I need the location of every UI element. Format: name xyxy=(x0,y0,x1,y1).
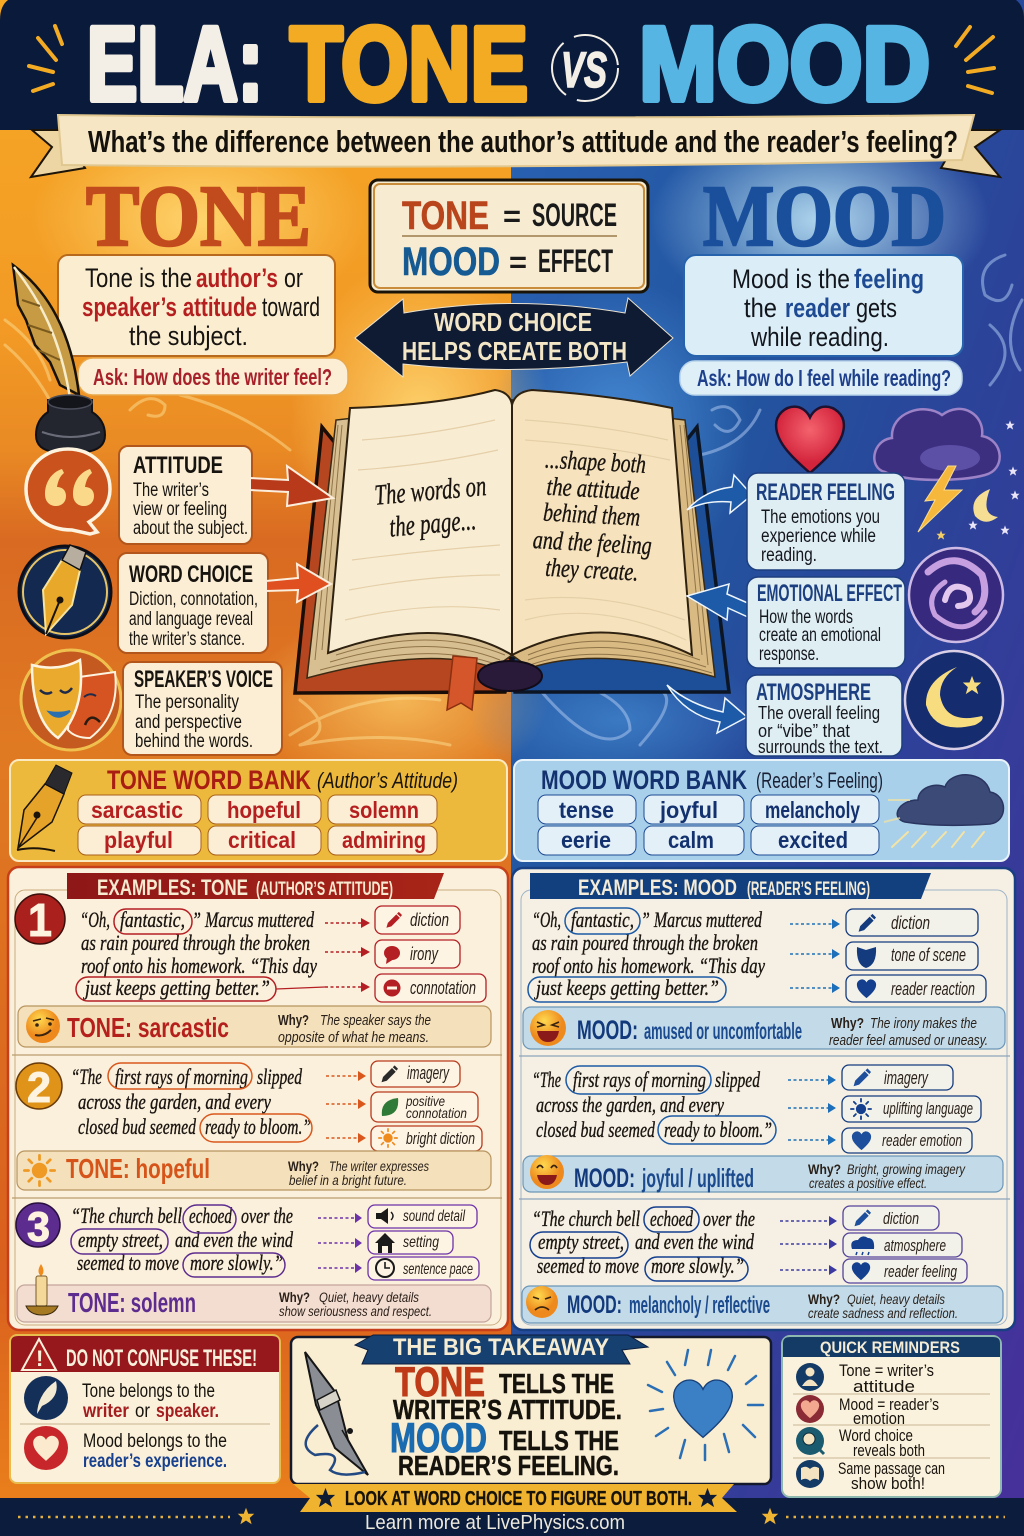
panel: tone word bank: solemn xyxy=(349,797,419,823)
result: tone hopeful xyxy=(17,1151,491,1190)
reminder: mood xyxy=(796,1395,939,1428)
mood example 1 quote: “Oh, xyxy=(532,907,561,932)
result: tone sarcastic: opposite of what he means. xyxy=(278,1029,429,1046)
chip: tone of scene: tone of scene xyxy=(891,945,966,965)
example 2 quote: slipped xyxy=(257,1064,303,1089)
result: mood melancholy: create sadness and reflection. xyxy=(808,1305,958,1321)
panel: reader feeling: reading. xyxy=(761,545,817,566)
mood example 2 quote: slipped xyxy=(715,1067,761,1092)
mood definition box: reader xyxy=(785,293,850,323)
result: mood melancholy: Quiet, heavy details xyxy=(847,1291,945,1307)
tone definition box: or xyxy=(284,263,303,293)
mood example 1 quote xyxy=(528,907,765,1002)
header band xyxy=(0,0,1024,130)
center equation box: = xyxy=(509,246,527,279)
mood definition box: the xyxy=(744,293,777,323)
panel: do not confuse: or xyxy=(135,1401,151,1422)
arrow: emotional effect to book xyxy=(687,584,750,620)
reminder: same passage xyxy=(796,1459,945,1493)
panel: big takeaway: WRITER’S ATTITUDE. xyxy=(393,1394,622,1425)
result: tone sarcastic: The speaker says the xyxy=(320,1012,431,1029)
mood example 3 quote xyxy=(530,1206,755,1281)
reminder: word choice: Word choice xyxy=(839,1426,913,1445)
bookmark ribbon xyxy=(447,656,477,710)
tone definition box: author’s xyxy=(196,263,278,293)
chip: irony xyxy=(375,940,460,968)
book text left xyxy=(373,470,490,545)
title: ELA: xyxy=(87,6,263,123)
example 2 number badge: 2 xyxy=(27,1064,51,1112)
book text left: The words on xyxy=(373,470,488,512)
example 2 quote: closed bud seemed xyxy=(78,1114,197,1139)
example 1 quote xyxy=(76,907,325,1001)
background: mood half xyxy=(511,0,1024,1500)
mood example 2 quote: ready to bloom.” xyxy=(664,1117,772,1142)
panel: tone word bank: hopeful xyxy=(227,797,301,823)
panel: mood word bank: eerie xyxy=(561,827,611,853)
panel: do not confuse xyxy=(10,1335,280,1483)
panel: tone word bank: critical xyxy=(228,827,296,853)
reminder: mood: emotion xyxy=(853,1409,905,1428)
result: tone hopeful: TONE: hopeful xyxy=(66,1153,210,1184)
icon: storm cloud xyxy=(874,409,1000,480)
panel: reader feeling: experience while xyxy=(761,526,876,547)
chip: mood imagery xyxy=(842,1065,953,1090)
chip: setting xyxy=(368,1231,453,1254)
reminder: tone: attitude xyxy=(853,1377,915,1396)
panel: quick reminders xyxy=(782,1336,1001,1497)
icon: candle xyxy=(26,1264,58,1315)
icon: sad face xyxy=(526,1286,558,1318)
chip: mood diction 3 xyxy=(843,1206,939,1230)
background: warm and cool glows xyxy=(5,120,1022,790)
footer band xyxy=(0,1498,1024,1536)
example 3 quote xyxy=(71,1203,294,1277)
arrow: book to atmosphere xyxy=(667,685,747,733)
panel: do not confuse: DO NOT CONFUSE THESE! xyxy=(66,1345,257,1372)
panel: speaker's voice: SPEAKER’S VOICE xyxy=(134,666,273,693)
chip: connotation: connotation xyxy=(410,978,476,998)
panel: emotional effect: response. xyxy=(759,644,819,665)
chip: sentence pace xyxy=(368,1257,479,1280)
tone definition box: the subject. xyxy=(129,321,248,351)
example 2 quote: “The xyxy=(71,1064,102,1089)
panel: mood examples xyxy=(512,868,1015,1330)
panel: mood word bank: excited xyxy=(778,827,848,853)
vs badge: VS xyxy=(561,42,607,98)
example 2 number badge xyxy=(16,1063,62,1112)
result: mood joyful xyxy=(523,1155,1003,1193)
chip: uplifting language: uplifting language xyxy=(883,1099,973,1118)
panel: tone word bank: playful xyxy=(104,827,173,853)
result: tone solemn: Why? xyxy=(279,1289,310,1305)
icon: pen nib xyxy=(17,765,72,851)
panel: big takeaway: READER’S FEELING. xyxy=(398,1450,619,1481)
mood example 2 quote: first rays of morning xyxy=(573,1067,706,1092)
mood definition box: Mood is the xyxy=(732,264,850,294)
center equation box: SOURCE xyxy=(532,197,617,233)
chip: bright diction: bright diction xyxy=(406,1129,475,1148)
icon: large pen nib xyxy=(305,1352,368,1475)
example 1 number badge: 1 xyxy=(28,894,52,946)
result: mood joyful: MOOD: xyxy=(574,1163,635,1193)
panel: emotional effect xyxy=(747,577,905,668)
icon: theatre masks badge xyxy=(21,650,121,750)
panel: speaker's voice: The personality xyxy=(135,692,239,713)
reminder: tone: Tone = writer’s xyxy=(839,1361,934,1380)
mood example 3 quote: empty street, xyxy=(538,1229,624,1254)
chip: mood diction 3: diction xyxy=(883,1209,919,1228)
result: mood melancholy: Why? xyxy=(808,1291,840,1307)
reminder: same passage: show both! xyxy=(851,1474,925,1493)
example 2 quote: ready to bloom.” xyxy=(205,1114,311,1139)
result: mood joyful: joyful / uplifted xyxy=(641,1163,754,1193)
tone examples heading ribbon: EXAMPLES: TONE xyxy=(97,875,248,900)
chip: irony: irony xyxy=(410,944,439,964)
double arrow: word choice: WORD CHOICE xyxy=(434,307,592,337)
mood example 3 quote: “The church bell xyxy=(532,1206,640,1231)
tone definition box: speaker’s attitude xyxy=(82,292,257,322)
example 3 number badge xyxy=(16,1203,60,1250)
panel: atmosphere: ATMOSPHERE xyxy=(756,679,871,706)
icon: night sky crescent and stars xyxy=(936,420,1020,540)
panel: mood word bank: joyful xyxy=(659,797,718,823)
chip: atmosphere xyxy=(843,1233,962,1257)
subtitle banner xyxy=(31,115,1000,177)
book xyxy=(295,390,729,710)
chip: mood diction: diction xyxy=(891,913,930,933)
mood examples heading ribbon: (READER’S FEELING) xyxy=(747,879,870,900)
chip: positive connotation xyxy=(371,1092,478,1122)
result: mood melancholy: melancholy / reflective xyxy=(629,1292,770,1319)
tone examples heading ribbon xyxy=(67,873,444,900)
panel: word choice: WORD CHOICE xyxy=(129,561,253,588)
result: tone solemn: show seriousness and respect. xyxy=(279,1303,432,1319)
result: mood amused: Why? xyxy=(831,1015,864,1032)
panel: word choice xyxy=(118,553,268,653)
chip: reader emotion: reader emotion xyxy=(882,1131,962,1150)
reminder: tone xyxy=(796,1361,934,1396)
panel: do not confuse: speaker. xyxy=(156,1401,219,1422)
title sparks xyxy=(29,26,994,93)
arrow: word choice to book xyxy=(266,564,331,602)
icon: speech bubble with quotes xyxy=(26,449,110,534)
chip: imagery xyxy=(371,1061,460,1087)
mood example 3 quote: over the xyxy=(703,1206,755,1231)
mood heading: MOOD xyxy=(703,167,946,264)
center equation box xyxy=(370,180,648,292)
mood example 1 quote: just keeps getting better.” xyxy=(534,975,719,1000)
mood ask pill xyxy=(680,361,962,395)
book text right: they create. xyxy=(545,553,639,587)
result: mood amused xyxy=(523,1007,1005,1049)
result: mood amused: MOOD: xyxy=(577,1015,638,1045)
reminder: mood: Mood = reader’s xyxy=(839,1395,939,1414)
result: mood melancholy xyxy=(522,1286,1003,1323)
mood examples heading ribbon: EXAMPLES: MOOD xyxy=(578,875,737,900)
example 3 quote: over the xyxy=(241,1203,293,1228)
result: tone sarcastic: TONE: sarcastic xyxy=(67,1012,229,1043)
panel: atmosphere: surrounds the text. xyxy=(758,736,883,757)
panel: attitude: view or feeling xyxy=(133,499,227,520)
double arrow: word choice: HELPS CREATE BOTH xyxy=(402,336,627,366)
panel: mood word bank: tense xyxy=(559,797,614,823)
panel: word choice: and language reveal xyxy=(129,609,253,630)
panel: tone word bank: admiring xyxy=(342,827,426,853)
icon: feather badge xyxy=(24,1376,68,1420)
title xyxy=(87,6,930,123)
mood definition box: gets xyxy=(856,293,897,323)
icon: pen nib badge xyxy=(19,545,111,638)
panel: mood word bank: (Reader’s Feeling) xyxy=(756,768,883,793)
panel: big takeaway xyxy=(291,1334,771,1484)
icon: blue heart with rays xyxy=(648,1350,763,1460)
result: tone sarcastic xyxy=(18,1006,491,1047)
panel: tone word bank xyxy=(10,760,507,861)
book text right: and the feeling xyxy=(532,525,652,560)
mood definition box: feeling xyxy=(854,264,924,294)
yellow callout ribbon: LOOK AT WORD CHOICE TO FIGURE OUT BOTH. xyxy=(345,1488,692,1510)
mood example 3 quote: echoed xyxy=(650,1206,694,1231)
chip: diction: diction xyxy=(410,910,449,930)
chip: sentence pace: sentence pace xyxy=(403,1261,473,1278)
example 3 quote: and even the wind xyxy=(175,1227,294,1252)
mood example 2 quote: across the garden, and every xyxy=(536,1092,724,1117)
tone ask pill xyxy=(78,358,348,395)
chip: imagery: imagery xyxy=(407,1063,450,1083)
result: tone sarcastic: Why? xyxy=(278,1012,309,1029)
example 3 quote: echoed xyxy=(189,1203,233,1228)
result: tone hopeful: belief in a bright future. xyxy=(289,1172,407,1188)
example 1 quote: fantastic, xyxy=(120,907,185,932)
chip: reader feeling: reader feeling xyxy=(884,1262,957,1281)
book text right: the attitude xyxy=(546,472,640,506)
icon: red heart xyxy=(776,407,844,473)
chip: mood diction xyxy=(846,909,978,936)
tone examples heading ribbon: (AUTHOR’S ATTITUDE) xyxy=(256,879,393,900)
panel: tone examples xyxy=(8,867,508,1330)
tone definition box: toward xyxy=(262,292,320,322)
chip: positive connotation: connotation xyxy=(406,1105,467,1121)
example 3 number badge: 3 xyxy=(27,1203,50,1250)
panel: emotional effect: How the words xyxy=(759,607,853,628)
chip: bright diction xyxy=(371,1126,482,1151)
example 2 quote: across the garden, and every xyxy=(78,1089,271,1114)
center equation box: MOOD xyxy=(402,240,500,284)
panel: reader feeling: The emotions you xyxy=(761,507,880,528)
chip: reader reaction xyxy=(846,975,986,1002)
panel: attitude xyxy=(119,446,252,544)
panel: quick reminders: QUICK REMINDERS xyxy=(820,1338,960,1357)
panel: atmosphere: or “vibe” that xyxy=(758,720,850,741)
vs badge xyxy=(552,35,618,101)
panel: tone word bank: sarcastic xyxy=(91,797,183,823)
panel: attitude: about the subject. xyxy=(133,518,248,539)
result: mood joyful: Why? xyxy=(808,1161,841,1177)
panel: speaker's voice: and perspective xyxy=(135,712,242,733)
panel: reader feeling: READER FEELING xyxy=(756,479,895,506)
center equation box: = xyxy=(503,200,521,233)
yellow callout ribbon xyxy=(293,1484,737,1512)
footer link text: Learn more at LivePhysics.com xyxy=(365,1512,625,1534)
chip: diction xyxy=(375,906,460,934)
panel: big takeaway: MOOD xyxy=(390,1414,487,1461)
mood example 3 arrows xyxy=(780,1216,837,1275)
mood definition box: while reading. xyxy=(750,322,889,352)
mood example 1 quote: fantastic, xyxy=(571,907,634,932)
icon: warning triangle xyxy=(22,1339,56,1371)
example 3 arrows xyxy=(318,1213,362,1273)
example 1 quote: ” Marcus muttered xyxy=(192,907,315,932)
footer dots and stars xyxy=(18,1508,1005,1524)
result: mood joyful: creates a positive effect. xyxy=(809,1175,927,1191)
example 3 quote: “The church bell xyxy=(71,1203,182,1228)
result: mood joyful: Bright, growing imagery xyxy=(847,1161,966,1177)
chip: setting: setting xyxy=(403,1234,439,1251)
example 1 quote: “Oh, xyxy=(80,907,110,932)
background: tone half xyxy=(0,0,511,1500)
mood example 2 quote: “The xyxy=(532,1067,561,1092)
reminder: word choice xyxy=(796,1426,925,1460)
tone heading: TONE xyxy=(86,167,311,264)
takeaway ribbon: THE BIG TAKEAWAY xyxy=(393,1334,609,1361)
panel: mood word bank xyxy=(514,760,1009,861)
mood example 3 quote: and even the wind xyxy=(635,1229,755,1254)
panel: mood word bank: melancholy xyxy=(765,797,860,823)
reminder: word choice: reveals both xyxy=(853,1441,925,1460)
example 3 quote: seemed to move xyxy=(77,1250,179,1275)
panel: tone word bank: (Author’s Attitude) xyxy=(317,768,458,793)
example 1 quote: just keeps getting better.” xyxy=(83,975,270,1000)
panel: atmosphere xyxy=(746,675,902,757)
chip: positive connotation: positive xyxy=(405,1093,445,1109)
title: MOOD xyxy=(639,6,930,123)
icon: lightning bolt xyxy=(918,466,962,532)
chip: reader reaction: reader reaction xyxy=(891,979,975,999)
panel: big takeaway: TELLS THE xyxy=(499,1425,619,1456)
example 1 quote: roof onto his homework. “This day xyxy=(81,953,317,978)
panel: do not confuse: writer xyxy=(82,1401,130,1422)
chip: uplifting language xyxy=(842,1096,981,1122)
example 1 arrows xyxy=(325,918,370,992)
center equation box: TONE xyxy=(402,194,489,238)
mood example 1 quote: roof onto his homework. “This day xyxy=(532,953,765,978)
mood example 1 quote: as rain poured through the broken xyxy=(532,930,758,955)
book text left: the page... xyxy=(388,504,477,544)
example 1 quote: as rain poured through the broken xyxy=(81,930,310,955)
example 1 number badge xyxy=(15,894,65,946)
panel: speaker's voice: behind the words. xyxy=(135,731,253,752)
tone definition box xyxy=(58,255,335,356)
arrow: book to reader feeling xyxy=(687,475,752,513)
panel: speaker's voice xyxy=(123,662,282,755)
center equation box: EFFECT xyxy=(538,243,613,279)
result: mood melancholy: MOOD: xyxy=(567,1291,622,1319)
example 2 quote xyxy=(71,1063,312,1142)
panel: mood word bank: MOOD WORD BANK xyxy=(541,765,747,795)
icon: smirk face xyxy=(26,1009,60,1043)
panel: tone word bank: TONE WORD BANK xyxy=(107,765,311,795)
panel: mood word bank: calm xyxy=(668,827,714,853)
panel: do not confuse: reader’s experience. xyxy=(83,1451,227,1472)
panel: attitude: ATTITUDE xyxy=(133,452,223,479)
chip: reader feeling xyxy=(843,1259,967,1283)
title: TONE xyxy=(290,6,528,123)
mood example 3 quote: more slowly.” xyxy=(651,1253,744,1278)
book text right: ...shape both xyxy=(544,445,647,479)
chip: reader emotion xyxy=(842,1128,972,1153)
panel: emotional effect: EMOTIONAL EFFECT xyxy=(757,580,902,607)
panel: big takeaway: TONE xyxy=(395,1358,485,1405)
double arrow: word choice xyxy=(355,298,673,377)
reminder: same passage: Same passage can xyxy=(838,1459,945,1478)
result: mood amused: amused or uncomfortable xyxy=(644,1018,802,1044)
chip: atmosphere: atmosphere xyxy=(884,1236,946,1255)
chip: mood imagery: imagery xyxy=(884,1068,929,1088)
panel: emotional effect: create an emotional xyxy=(759,625,881,646)
result: mood amused: The irony makes the xyxy=(870,1015,977,1032)
result: tone solemn xyxy=(17,1264,491,1322)
icon: heart badge xyxy=(24,1426,68,1470)
mood definition box xyxy=(684,255,963,356)
chip: tone of scene xyxy=(846,942,978,970)
mood example 2 arrows xyxy=(788,1075,836,1145)
icon: grinning face xyxy=(530,1155,564,1189)
panel: do not confuse: Tone belongs to the xyxy=(82,1381,215,1402)
icon: warning triangle: ! xyxy=(36,1346,43,1371)
icon: swirl badge xyxy=(909,548,1003,642)
icon: rain cloud xyxy=(884,775,1004,847)
chip: sound detail: sound detail xyxy=(403,1208,465,1225)
mood examples heading ribbon xyxy=(530,873,931,900)
panel: word choice: Diction, connotation, xyxy=(129,589,258,610)
icon: moon badge xyxy=(905,651,1003,749)
example 3 quote: empty street, xyxy=(78,1227,163,1252)
panel: big takeaway: TELLS THE xyxy=(499,1368,614,1399)
tone definition box: Tone is the xyxy=(85,263,192,293)
panel: word choice: the writer’s stance. xyxy=(129,629,245,650)
example 2 arrows xyxy=(326,1071,366,1143)
panel: atmosphere: The overall feeling xyxy=(758,702,880,723)
tone ask pill: Ask: How does the writer feel? xyxy=(93,364,332,390)
result: tone solemn: Quiet, heavy details xyxy=(319,1289,419,1305)
icon: laughing face xyxy=(530,1010,566,1046)
panel: attitude: The writer’s xyxy=(133,480,209,501)
chip: sound detail xyxy=(368,1205,477,1228)
panel: reader feeling xyxy=(747,473,905,570)
arrow: attitude to book xyxy=(250,466,333,506)
panel: do not confuse: Mood belongs to the xyxy=(83,1431,227,1452)
mood example 3 quote: seemed to move xyxy=(537,1253,639,1278)
example 3 quote: more slowly.” xyxy=(190,1250,283,1275)
mood example 1 quote: ” Marcus muttered xyxy=(641,907,763,932)
icon: quill and ink bottle xyxy=(13,265,105,452)
mood example 1 arrows xyxy=(790,919,840,993)
example 2 quote: first rays of morning xyxy=(115,1064,248,1089)
result: tone hopeful: Why? xyxy=(288,1158,319,1174)
result: tone hopeful: The writer expresses xyxy=(329,1158,429,1174)
chip: connotation xyxy=(375,974,486,1002)
book text right: behind them xyxy=(543,498,641,532)
book text right xyxy=(531,444,657,587)
mood example 2 quote xyxy=(532,1066,776,1144)
mood example 2 quote: closed bud seemed xyxy=(536,1117,656,1142)
result: tone solemn: TONE: solemn xyxy=(68,1287,196,1318)
